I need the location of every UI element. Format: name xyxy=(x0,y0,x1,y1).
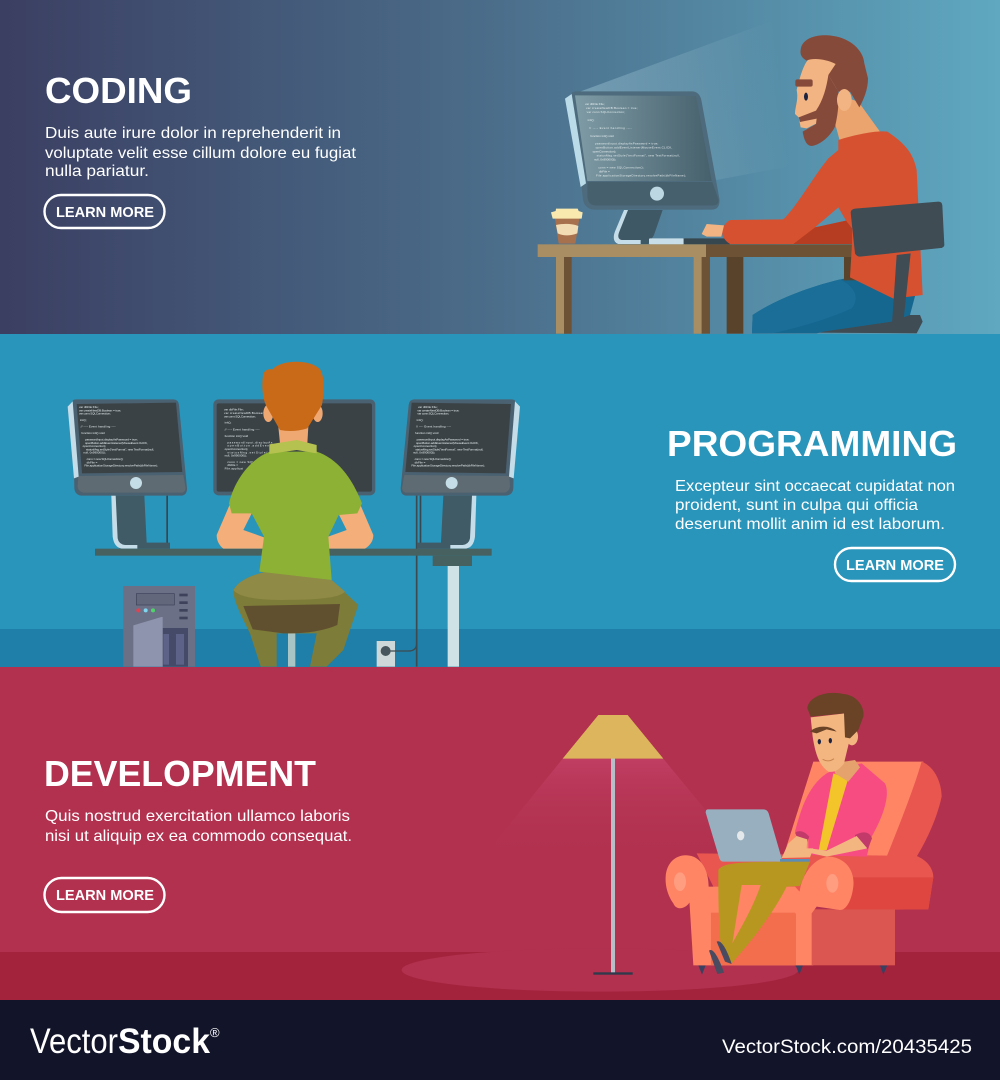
person: hand xyxy=(702,224,724,237)
code text on monitors: File.applicationStorageDirectory.resolvePath(dbFileName); xyxy=(84,464,158,468)
code text: passwordInput.displayAsPassword = true; xyxy=(595,142,658,146)
code text on monitors: var conn:SQLConnection; xyxy=(79,411,111,415)
code text xyxy=(585,102,686,178)
code text on monitors: var createNewDB:Boolean = true; xyxy=(417,408,459,412)
code text on monitors: init(); xyxy=(417,418,423,422)
code text on monitors: function init():void xyxy=(415,431,439,435)
button: learn more development: LEARN MORE xyxy=(56,888,154,904)
computer tower xyxy=(123,586,195,667)
code text on monitors: null, 0x990000)); xyxy=(83,451,106,455)
code text on monitors: statusMsg.setStyle("textFormat", new TextFormat(null, xyxy=(86,447,154,451)
stool post xyxy=(288,632,295,667)
heading: programming: PROGRAMMING xyxy=(667,423,957,464)
code text: var conn:SQLConnection; xyxy=(587,110,625,114)
footer background xyxy=(0,1000,1000,1080)
vectorstock logo: Vector xyxy=(30,1022,118,1061)
code text on monitors: function init():void xyxy=(81,431,105,435)
code text: init(); xyxy=(588,118,594,122)
button: learn more programming: LEARN MORE xyxy=(846,558,944,574)
code text on monitors: statusMsg.setStyle("textFormat", new TextFormat(null, xyxy=(415,447,483,451)
monitor stand xyxy=(614,210,663,244)
panel: development xyxy=(0,667,1000,1000)
code text on monitors: openConnection); xyxy=(225,447,248,451)
floor: programming xyxy=(0,629,1000,667)
code text: openButton.addEventListener(MouseEvent.CLICK, xyxy=(596,146,672,150)
text block: programming description: Excepteur sint occaecat cupidatat non xyxy=(675,478,955,495)
code text on monitors: var dbFile:File; xyxy=(418,405,438,409)
illustration: man with laptop in armchair under lamp xyxy=(402,693,942,992)
code text on monitors: dbFile = xyxy=(87,460,98,464)
person: trousers and stool seat xyxy=(233,572,358,667)
text block: coding description: Duis aute irure dolor in reprehenderit in xyxy=(45,125,341,142)
code text on monitors: null, 0x990000)); xyxy=(225,453,247,457)
right monitor xyxy=(401,399,520,549)
person: trousers xyxy=(718,862,810,963)
code text: conn = new SQLConnection(); xyxy=(598,166,644,170)
trousers xyxy=(752,277,915,333)
code text: function init():void xyxy=(590,134,614,138)
floor lamp xyxy=(563,715,663,975)
code text on monitors: init(); xyxy=(225,421,231,425)
vectorstock logo xyxy=(30,1022,220,1061)
heading: coding: CODING xyxy=(45,70,192,111)
text block: programming description xyxy=(675,478,955,533)
panel background: coding xyxy=(0,0,1000,334)
code text on monitors: openConnection); xyxy=(83,444,106,448)
code text on monitors: var conn:SQLConnection; xyxy=(224,414,256,418)
person: red sweater xyxy=(722,131,923,299)
illustration: programmer at three monitors xyxy=(68,362,520,667)
code text: dbFile = xyxy=(599,170,610,174)
code text: // ---- Event handling ---- xyxy=(589,126,632,130)
person: shoes xyxy=(709,941,732,974)
panel background: programming xyxy=(0,334,1000,667)
panel background: development xyxy=(0,667,1000,1000)
text block: coding description: nulla pariatur. xyxy=(45,163,149,180)
image id: VectorStock.com/20435425 xyxy=(722,1036,972,1058)
code text on monitors: var dbFile:File; xyxy=(224,408,244,412)
text block: development description: nisi ut aliquip ex ea commodo consequat. xyxy=(45,828,352,845)
person: sweater shadow xyxy=(793,221,852,244)
code text on monitors: // ---- Event handling ---- xyxy=(416,425,451,429)
vectorstock logo: Stock xyxy=(118,1022,211,1061)
text block: development description: Quis nostrud exercitation ullamco laboris xyxy=(45,808,350,825)
armchair xyxy=(666,762,942,975)
panel: coding xyxy=(0,0,1000,334)
person: head xyxy=(262,362,324,431)
armchair front arm xyxy=(795,857,854,913)
person: pink shirt and torso xyxy=(782,763,887,858)
code text: var createNewDB:Boolean = true; xyxy=(586,106,638,110)
office chair xyxy=(851,202,944,328)
code text on monitors: File.applicationStorageDirectory.resolvePath(dbFileName); xyxy=(411,464,485,468)
person: head xyxy=(807,693,864,782)
center monitor xyxy=(213,399,375,495)
footer bar xyxy=(0,1000,1000,1080)
text block: coding description: voluptate velit esse cillum dolore eu fugiat xyxy=(45,145,357,162)
code text on monitors: dbFile = xyxy=(227,463,238,467)
left monitor xyxy=(68,399,187,549)
code text: null, 0x990000)); xyxy=(594,158,616,162)
text block: development description xyxy=(45,808,352,845)
code text on monitors: null, 0x990000)); xyxy=(413,451,435,455)
code text on monitors: // ---- Event handling ---- xyxy=(81,425,116,429)
screen light beam xyxy=(580,17,797,180)
panel: programming xyxy=(0,334,1000,667)
code text on monitors: var createNewDB:Boolean xyxy=(224,411,264,415)
lamp light cone xyxy=(483,759,747,860)
code text on monitors: openButton.addEventListener(MouseEvent.CLICK, xyxy=(416,441,479,445)
code text: var dbFile:File; xyxy=(585,102,605,106)
floor light pool xyxy=(402,948,798,992)
illustration: developer at computer xyxy=(538,17,944,334)
code text on monitors: File.applicat xyxy=(225,466,243,470)
code text on monitors: conn = new SQLConnection(); xyxy=(415,457,451,461)
button: learn more coding: LEARN MORE xyxy=(56,205,154,221)
laptop xyxy=(706,809,810,862)
vectorstock logo: ® xyxy=(210,1025,220,1040)
person: neck and head xyxy=(795,35,880,146)
code text on monitors: openButton.addEventListener(MouseEvent.CLICK, xyxy=(85,441,148,445)
code text on monitors: conn = new SQL xyxy=(227,460,254,464)
person: gap under arm xyxy=(815,207,846,227)
text block: coding description xyxy=(45,125,357,180)
code text: openConnection); xyxy=(593,150,616,154)
keyboard xyxy=(649,238,730,244)
code text on monitors: conn = new SQLConnection(); xyxy=(87,457,123,461)
code text on monitors: statusMsg.setStyle( xyxy=(227,450,267,454)
desk xyxy=(538,244,859,334)
code text on monitors: dbFile = xyxy=(415,460,426,464)
button: learn more development xyxy=(44,878,164,912)
button: learn more coding xyxy=(44,195,164,228)
code text on monitors: var createNewDB:Boolean = true; xyxy=(79,408,121,412)
coffee cup xyxy=(551,209,583,244)
cable and wall outlet xyxy=(377,496,417,667)
code text: File.applicationStorageDirectory.resolvePath(dbFileName); xyxy=(596,174,686,178)
floor: development xyxy=(0,952,1000,1000)
code text on monitors: init(); xyxy=(80,418,87,422)
person: arms xyxy=(217,504,373,549)
chair seat and legs behind xyxy=(813,315,923,333)
code text: statusMsg.setStyle("textFormat", new TextFormat(null, xyxy=(597,154,680,158)
button: learn more programming xyxy=(835,548,955,581)
code text on monitors: passwordInput.displayAsPassword = true; xyxy=(85,438,138,442)
code text on monitors: function init():void xyxy=(225,434,248,438)
code text on monitors: var conn:SQLConnection; xyxy=(417,411,449,415)
desk xyxy=(95,549,492,667)
code text on monitors: openButton.addEvent xyxy=(227,444,271,448)
heading: development: DEVELOPMENT xyxy=(44,753,316,794)
code text on monitors xyxy=(79,405,485,470)
code text on monitors: var dbFile:File; xyxy=(79,405,99,409)
monitor xyxy=(565,91,720,210)
text block: programming description: proident, sunt in culpa qui officia xyxy=(675,497,918,514)
person: green shirt xyxy=(229,427,362,580)
code text on monitors: passwordInput.displayAs xyxy=(227,441,273,445)
code text on monitors: passwordInput.displayAsPassword = true; xyxy=(417,438,469,442)
text block: programming description: deserunt mollit anim id est laborum. xyxy=(675,516,945,533)
code text on monitors: // ---- Event handling ---- xyxy=(225,427,260,431)
code text on monitors: openConnection); xyxy=(414,444,437,448)
